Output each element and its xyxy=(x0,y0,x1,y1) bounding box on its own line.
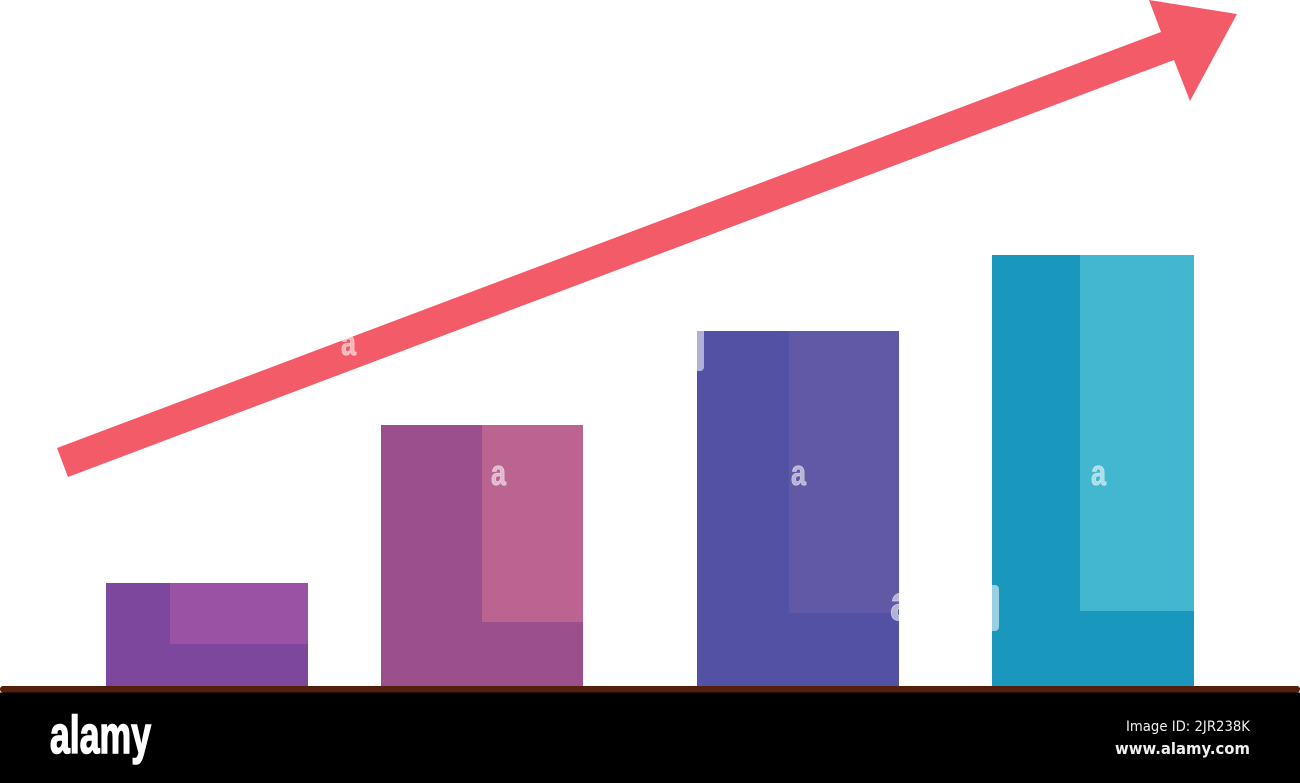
bar 3: indigo xyxy=(697,331,899,686)
website: www.alamy.com xyxy=(1115,739,1250,758)
bar 1: purple xyxy=(106,583,308,686)
image id: Image ID: 2JR238K xyxy=(1126,719,1250,735)
bar 3: indigo: a xyxy=(791,452,807,493)
alamy logo: alamy xyxy=(50,706,151,765)
bar 4: teal: a xyxy=(1091,452,1107,493)
bar 4: teal xyxy=(985,255,1194,686)
bar 2: magenta xyxy=(381,425,583,686)
bar 3: indigo: a xyxy=(890,575,915,631)
bar 2: magenta: a xyxy=(491,452,507,493)
baseline xyxy=(0,686,1300,692)
rising arrow: a xyxy=(341,322,357,363)
footer band xyxy=(0,692,1300,783)
